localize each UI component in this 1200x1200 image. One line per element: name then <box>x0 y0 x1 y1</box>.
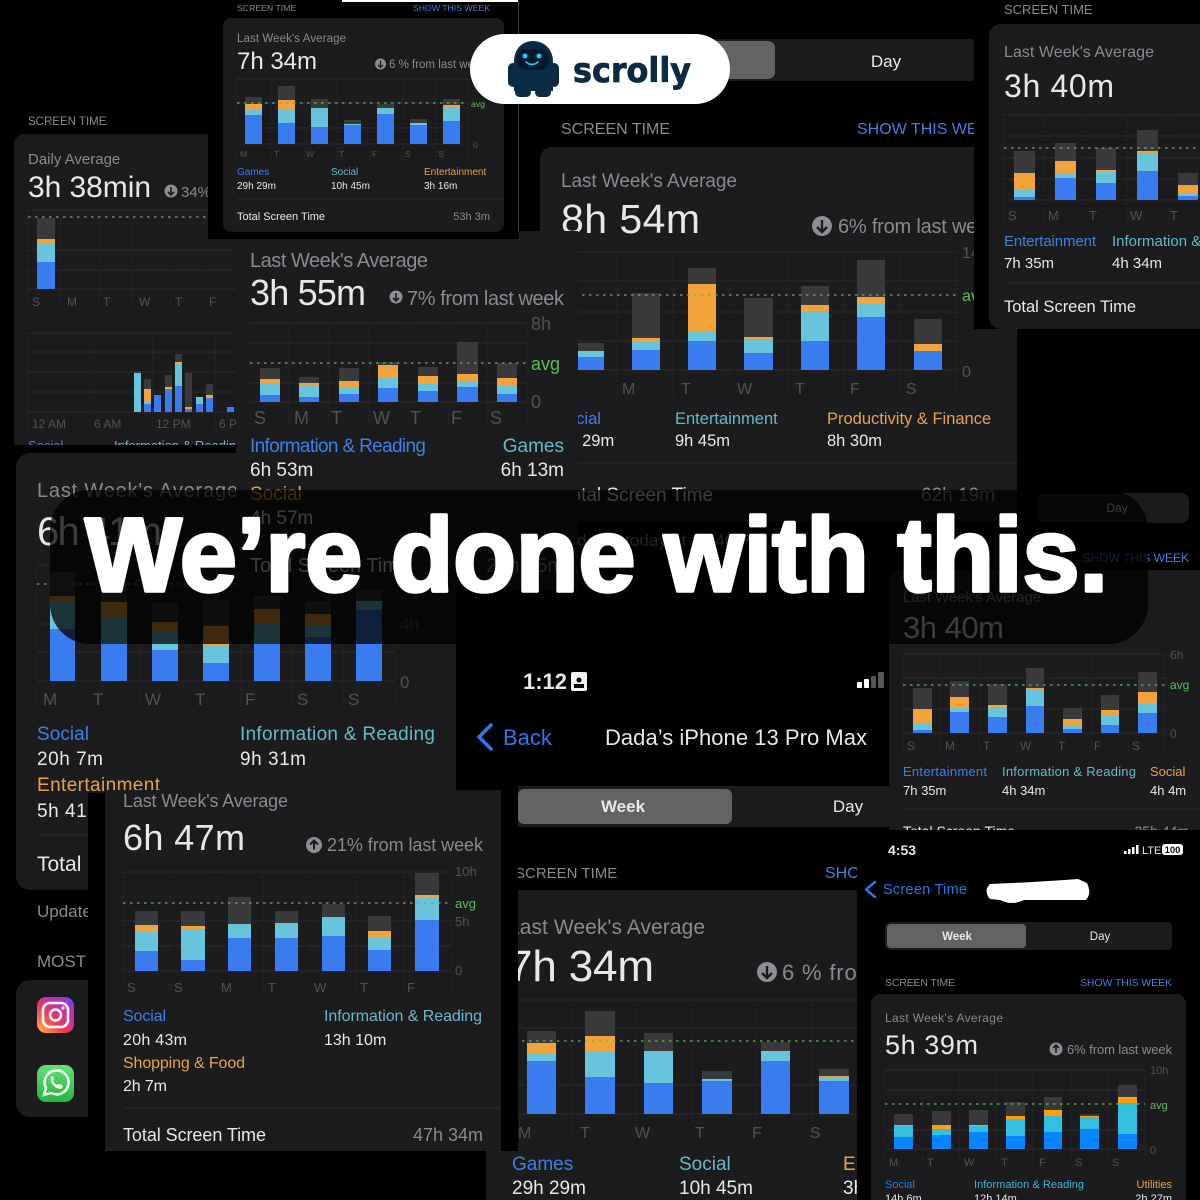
bar chart: 0 <box>531 392 541 412</box>
card heading: Last Week's Average <box>903 589 1041 606</box>
bar chart: F <box>1094 739 1101 753</box>
card <box>871 994 1186 1200</box>
icon: id badge <box>571 672 587 691</box>
heading <box>1004 44 1154 104</box>
back link: Screen Time <box>883 882 967 898</box>
legend: 2h 7m <box>123 1078 167 1095</box>
legend: Social <box>1150 764 1186 779</box>
bar chart: F <box>1039 1157 1046 1169</box>
card heading <box>903 589 1041 645</box>
legend: Information & Reading <box>240 724 435 745</box>
panel: 3h 55m screen time <box>236 231 578 585</box>
legend: Social <box>679 1154 731 1175</box>
legend: 4h 34m <box>1002 783 1045 798</box>
legend: Games <box>503 436 564 457</box>
bar chart: S <box>810 1125 821 1142</box>
bar chart <box>1004 115 1200 226</box>
bar chart: T <box>795 381 805 398</box>
legend <box>1004 233 1200 272</box>
bar chart: S <box>1112 1157 1119 1169</box>
panel: lower center 7h 34m <box>486 865 983 1200</box>
legend <box>28 438 243 453</box>
heading: Last Week's Average <box>237 33 346 45</box>
legend: 4h 4m <box>1150 783 1186 798</box>
total row: 25h 44m <box>1135 823 1189 839</box>
legend: 9h 31m <box>240 749 306 770</box>
week day tabs <box>885 922 1172 950</box>
legend: Information & Reading <box>974 1179 1084 1191</box>
legend: Information & Reading <box>250 436 426 457</box>
bar chart <box>37 565 419 709</box>
legend: Entertainment <box>37 775 161 796</box>
label: SCREEN TIME <box>1004 2 1093 17</box>
day tab: Day <box>1106 501 1128 515</box>
bar chart: M <box>518 1125 531 1142</box>
bar chart: F <box>372 149 377 159</box>
heading: 6h 47m <box>123 817 245 858</box>
updated note: Updated today at 12:40 PM <box>555 531 765 550</box>
section labels: SHOW THIS WEEK <box>825 865 967 882</box>
bar chart: T <box>410 408 421 428</box>
legend: 4h 34m <box>1112 255 1162 272</box>
bar chart: T <box>695 1125 705 1142</box>
panel: 6h 41m week card with most used apps <box>16 453 456 1117</box>
show this week link: SHOW THIS WEEK <box>1083 551 1189 565</box>
wordmark: scrolly <box>573 51 691 91</box>
bar chart: T <box>195 690 205 709</box>
section labels <box>515 865 967 882</box>
week chart: T <box>175 295 183 309</box>
section labels: SCREEN TIME <box>885 977 955 989</box>
section labels <box>885 977 1172 989</box>
bar chart: S <box>907 739 915 753</box>
week day tabs: Day <box>1090 931 1110 943</box>
legend: Social <box>556 410 601 428</box>
total row: Total Screen Time <box>250 555 410 577</box>
card <box>105 790 501 1151</box>
card background <box>236 231 578 590</box>
heading <box>123 791 484 858</box>
bar chart <box>885 1065 1168 1169</box>
card heading: 3h 40m <box>903 610 1004 645</box>
legend: 3h 16m <box>843 1178 906 1199</box>
status time: 4:53 <box>888 842 916 858</box>
legend: Social <box>37 724 89 745</box>
bar chart: W <box>964 1157 975 1169</box>
legend: Information & Reading <box>114 438 243 453</box>
bar chart: avg <box>962 288 988 305</box>
legend: Social <box>28 438 64 453</box>
bar chart: T <box>1089 208 1097 223</box>
legend: 13h 10m <box>324 1032 386 1049</box>
icon: back chevron <box>866 882 875 897</box>
panel: lower right screen time 3h 40m <box>889 493 1200 839</box>
bar chart: avg <box>1170 678 1189 692</box>
legend: 4h 57m <box>250 508 313 529</box>
heading: 6% from last week <box>838 216 999 238</box>
device title: Dada’s iPhone 13 Pro Max <box>605 725 867 750</box>
panel: week day tabs center: Week <box>601 797 646 816</box>
bar chart: T <box>580 1125 590 1142</box>
legend <box>250 436 564 529</box>
legend: 29h 29m <box>237 181 276 192</box>
icon: instagram <box>37 997 74 1033</box>
legend: Information & Reading <box>1002 764 1136 779</box>
legend: 29h 29m <box>550 432 614 450</box>
heading <box>28 151 211 204</box>
title: We’re done with this. <box>85 497 1108 614</box>
section labels: SHOW THIS WEEK <box>857 121 999 138</box>
bar chart: S <box>438 149 444 159</box>
bar chart: avg <box>455 896 476 911</box>
legend: Utilities <box>1137 1179 1172 1191</box>
total row: 53h 3m <box>453 211 490 223</box>
bar chart: T <box>268 980 276 995</box>
heading: 3h 55m <box>250 272 366 313</box>
legend: Shopping & Food <box>123 1055 245 1072</box>
week chart: F <box>209 295 216 309</box>
legend: 6h 53m <box>250 460 313 481</box>
bar chart <box>123 864 477 995</box>
legend: 7h 35m <box>1004 255 1054 272</box>
panel: week day tabs center: Day <box>833 797 864 816</box>
heading: 21% from last week <box>327 835 484 855</box>
bar chart: avg <box>1150 1100 1168 1112</box>
bar chart: T <box>360 980 368 995</box>
bar chart: S <box>127 980 136 995</box>
icon: whatsapp <box>37 1065 74 1102</box>
legend: 7h 35m <box>903 783 946 798</box>
bar chart: M <box>889 1157 898 1169</box>
bar chart <box>540 245 989 398</box>
section labels: SCREEN TIME <box>561 121 670 138</box>
bar chart <box>903 648 1189 753</box>
bar chart: 0 <box>1170 727 1177 741</box>
heading <box>250 250 565 313</box>
heading: 7h 34m <box>508 942 654 991</box>
hourly chart: 12 PM <box>156 417 191 431</box>
bar chart: W <box>635 1125 651 1142</box>
week day tabs: Day <box>871 52 902 71</box>
bar chart: S <box>1132 739 1140 753</box>
bar chart: M <box>240 149 247 159</box>
heading: Last Week's Average <box>508 916 705 939</box>
total row <box>903 823 1189 839</box>
bar chart: F <box>451 408 462 428</box>
total row: Total Screen Time <box>561 485 713 506</box>
card <box>540 147 1017 521</box>
heading: 7h 34m <box>237 48 317 75</box>
heading: Last Week's Average <box>885 1011 1003 1025</box>
bar chart: S <box>490 408 502 428</box>
week chart: S <box>32 295 40 309</box>
heading <box>508 916 983 991</box>
bar chart: T <box>274 149 280 159</box>
bar chart: T <box>1058 739 1066 753</box>
section labels <box>561 121 999 138</box>
bar chart: 6h <box>1170 648 1183 662</box>
bar chart: 0 <box>400 673 409 692</box>
legend: Social <box>331 167 358 178</box>
panel: bottom right phone 5h 39m <box>864 842 1186 1200</box>
legend: Entertainment <box>843 1154 962 1175</box>
bar chart: T <box>681 381 691 398</box>
bar chart: W <box>306 149 315 159</box>
legend: 10h 45m <box>679 1178 753 1199</box>
bar chart: 0 <box>473 140 478 150</box>
icon: signal bars <box>857 672 884 688</box>
bar chart: 14h <box>962 245 989 262</box>
bar chart: S <box>1075 1157 1082 1169</box>
legend: 8h 30m <box>827 432 882 450</box>
heading: 34% <box>181 184 211 201</box>
legend: 20h 43m <box>123 1032 187 1049</box>
bar chart <box>250 314 560 428</box>
icon: robot mascot <box>508 41 559 97</box>
total row: 27h 25m <box>486 555 564 577</box>
week chart: W <box>139 295 151 309</box>
legend: Social <box>250 484 302 505</box>
panel: top center 7h 34m <box>208 0 519 239</box>
heading <box>885 1011 1172 1060</box>
bar chart: S <box>254 408 266 428</box>
legend: 29h 29m <box>512 1178 586 1199</box>
bar chart: M <box>294 408 309 428</box>
bar chart: avg <box>531 354 560 374</box>
day tab <box>1037 493 1189 523</box>
heading <box>237 33 486 75</box>
bar chart: F <box>752 1125 762 1142</box>
total row: Total Screen Time <box>1004 298 1136 316</box>
card <box>223 18 504 232</box>
bar chart: 10h <box>455 864 477 879</box>
bar chart: T <box>983 739 991 753</box>
heading: 8h 54m <box>561 196 700 242</box>
bar chart: W <box>373 408 390 428</box>
status time: 1:12 <box>523 669 567 694</box>
legend: Entertainment <box>903 764 987 779</box>
updated note: Updated today <box>37 902 148 921</box>
total row <box>123 1125 483 1145</box>
bar chart: M <box>43 690 57 709</box>
status icons: LTE <box>1142 845 1161 857</box>
heading <box>561 171 999 242</box>
total row: 62h 19m <box>921 485 995 506</box>
week chart <box>28 210 240 309</box>
week day tabs: Week <box>942 931 973 943</box>
week chart: T <box>103 295 111 309</box>
bar chart: S <box>297 690 308 709</box>
legend <box>903 764 1186 798</box>
legend: Games <box>512 1154 573 1175</box>
legend: 3h 16m <box>424 181 457 192</box>
panel: top right 3h 40m <box>974 2 1200 329</box>
bar chart: S <box>1008 208 1017 223</box>
panel: 6h 47m week card <box>88 790 518 1151</box>
heading: Last Week's Average <box>250 250 428 272</box>
bar chart: 8h <box>531 314 551 334</box>
bar chart: T <box>927 1157 934 1169</box>
heading: Last Week's Average <box>1004 44 1154 61</box>
bar chart: S <box>348 690 359 709</box>
legend <box>885 1179 1172 1200</box>
section labels <box>237 3 490 13</box>
legend: 5h 41m <box>37 801 103 822</box>
total row: 47h 34m <box>413 1125 483 1145</box>
icon: back chevron <box>479 725 491 749</box>
bar chart: W <box>1130 208 1143 223</box>
apps card <box>16 980 216 1117</box>
bar chart: 4h <box>400 615 419 634</box>
bar chart: 5h <box>455 914 469 929</box>
headline band <box>50 490 1148 644</box>
legend: Social <box>885 1179 915 1191</box>
bar chart: T <box>1001 1157 1008 1169</box>
status icons <box>1124 844 1183 857</box>
total row <box>237 211 490 223</box>
total row <box>250 555 564 577</box>
card <box>889 570 1200 850</box>
section labels: SHOW THIS WEEK <box>413 3 490 13</box>
bar chart: S <box>405 149 411 159</box>
legend: Entertainment <box>424 167 486 178</box>
section labels: SCREEN TIME <box>515 865 617 882</box>
card <box>989 24 1200 329</box>
panel: daily average <box>14 116 247 453</box>
bar chart: T <box>331 408 342 428</box>
card <box>14 134 314 474</box>
bar chart <box>508 1000 857 1142</box>
bar chart: avg <box>471 99 485 109</box>
heading: Last Week's Average <box>37 480 238 502</box>
label: SCREEN TIME <box>28 116 107 128</box>
bar chart: M <box>1048 208 1059 223</box>
legend <box>37 724 435 822</box>
week day tabs <box>518 39 974 81</box>
heading <box>37 480 238 554</box>
status icons: 100 <box>1165 845 1180 856</box>
heading: 3h 38min <box>28 171 151 204</box>
legend <box>512 1154 962 1199</box>
bar chart: S <box>174 980 183 995</box>
panel: 8h 54m screen time <box>540 39 1017 550</box>
section labels: SCREEN TIME <box>237 3 296 13</box>
bar chart: 0 <box>962 364 971 381</box>
bar chart: 0 <box>455 963 462 978</box>
most used label: MOST USED <box>37 952 138 971</box>
bar chart: F <box>407 980 415 995</box>
heading: Daily Average <box>28 151 120 168</box>
total row: Total Screen Time <box>903 823 1015 839</box>
legend: Games <box>237 167 269 178</box>
panel: phone header dada's iphone <box>479 669 884 750</box>
total row: Total Screen Time <box>37 853 205 876</box>
total row: Total Screen Time <box>123 1125 266 1145</box>
heading: 7% from last week <box>407 288 565 310</box>
bar chart: M <box>221 980 232 995</box>
bar chart: W <box>145 690 161 709</box>
heading: 6% from last week <box>1067 1042 1172 1057</box>
card <box>486 890 906 1200</box>
legend: 20h 7m <box>37 749 103 770</box>
week chart: M <box>67 295 77 309</box>
total row <box>561 485 995 506</box>
bar chart: F <box>850 381 860 398</box>
legend <box>237 167 486 192</box>
legend: 6h 13m <box>501 460 564 481</box>
bar chart: S <box>906 381 917 398</box>
redaction scribble <box>986 879 1089 903</box>
legend: Information & Reading <box>324 1008 482 1025</box>
bar chart: W <box>314 980 327 995</box>
hourly chart: 6 AM <box>94 417 121 431</box>
hourly chart <box>28 333 247 431</box>
legend <box>123 1008 482 1095</box>
heading: 5h 39m <box>885 1030 978 1060</box>
bar chart: F <box>245 690 255 709</box>
panel: week day tabs center <box>518 786 890 827</box>
legend: Entertainment <box>675 410 778 428</box>
legend: Social <box>123 1008 166 1025</box>
legend <box>550 410 991 450</box>
hourly chart: 12 AM <box>32 417 66 431</box>
bar chart <box>237 79 485 160</box>
heading: 6 % from last week <box>782 960 983 985</box>
legend: Productivity & Finance <box>827 410 991 428</box>
bar chart: 10h <box>1150 1065 1168 1077</box>
bar chart: T <box>339 149 345 159</box>
card <box>16 453 496 890</box>
bar chart: 0 <box>1150 1145 1156 1157</box>
section labels: SHOW THIS WEEK <box>1080 977 1172 989</box>
legend: 9h 45m <box>675 432 730 450</box>
legend: 10h 45m <box>331 181 370 192</box>
logo: scrolly pill <box>470 34 730 104</box>
heading: 6 % from last week <box>389 59 486 71</box>
legend: Entertainment <box>1004 233 1097 250</box>
heading: 3h 40m <box>1004 68 1114 104</box>
bar chart: T <box>1170 208 1178 223</box>
bar chart: M <box>622 381 635 398</box>
back link: Back <box>503 725 553 750</box>
bar chart: W <box>737 381 753 398</box>
heading: 6h 41m <box>37 510 162 554</box>
bar chart: W <box>1020 739 1032 753</box>
bar chart: T <box>93 690 103 709</box>
hourly chart: 6 PM <box>219 417 247 431</box>
heading: Last Week's Average <box>561 171 737 192</box>
total row: Total Screen Time <box>237 211 325 223</box>
bar chart: M <box>945 739 955 753</box>
heading: Last Week's Average <box>123 791 288 811</box>
